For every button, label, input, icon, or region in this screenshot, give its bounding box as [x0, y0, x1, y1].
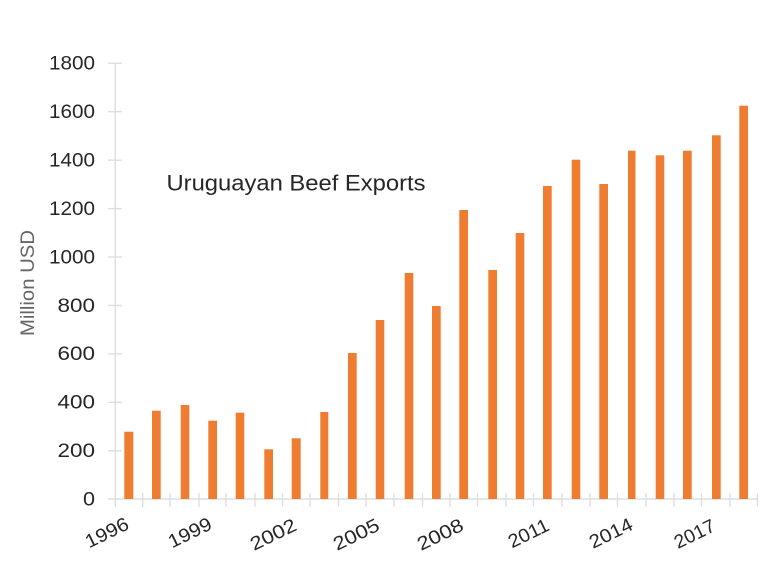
- chart title: Uruguayan Beef Exports: [166, 170, 426, 196]
- x axis: [108, 493, 758, 507]
- x axis labels: 2005: [330, 515, 383, 555]
- x axis labels: 1996: [82, 514, 133, 553]
- x axis labels: 2017: [671, 516, 719, 553]
- y axis labels: 1600: [49, 102, 95, 123]
- x axis labels: [82, 514, 719, 555]
- y axis labels: 400: [58, 392, 95, 414]
- y axis labels: 1200: [49, 199, 95, 220]
- y axis labels: [49, 54, 95, 510]
- y axis title: Million USD: [17, 230, 39, 336]
- x axis labels: 2014: [586, 514, 637, 553]
- y axis labels: 1400: [49, 150, 95, 172]
- y axis labels: 800: [58, 296, 95, 317]
- x axis labels: 2002: [247, 515, 300, 555]
- y axis labels: 0: [83, 490, 95, 510]
- y axis: [108, 63, 122, 507]
- y axis labels: 200: [58, 441, 95, 462]
- y axis labels: 600: [58, 344, 95, 365]
- x axis labels: 1999: [165, 514, 216, 553]
- x axis labels: 2011: [505, 515, 553, 553]
- y axis labels: 1000: [49, 248, 95, 268]
- bars: [124, 106, 748, 499]
- x axis labels: 2008: [414, 515, 467, 555]
- y axis labels: 1800: [49, 54, 95, 74]
